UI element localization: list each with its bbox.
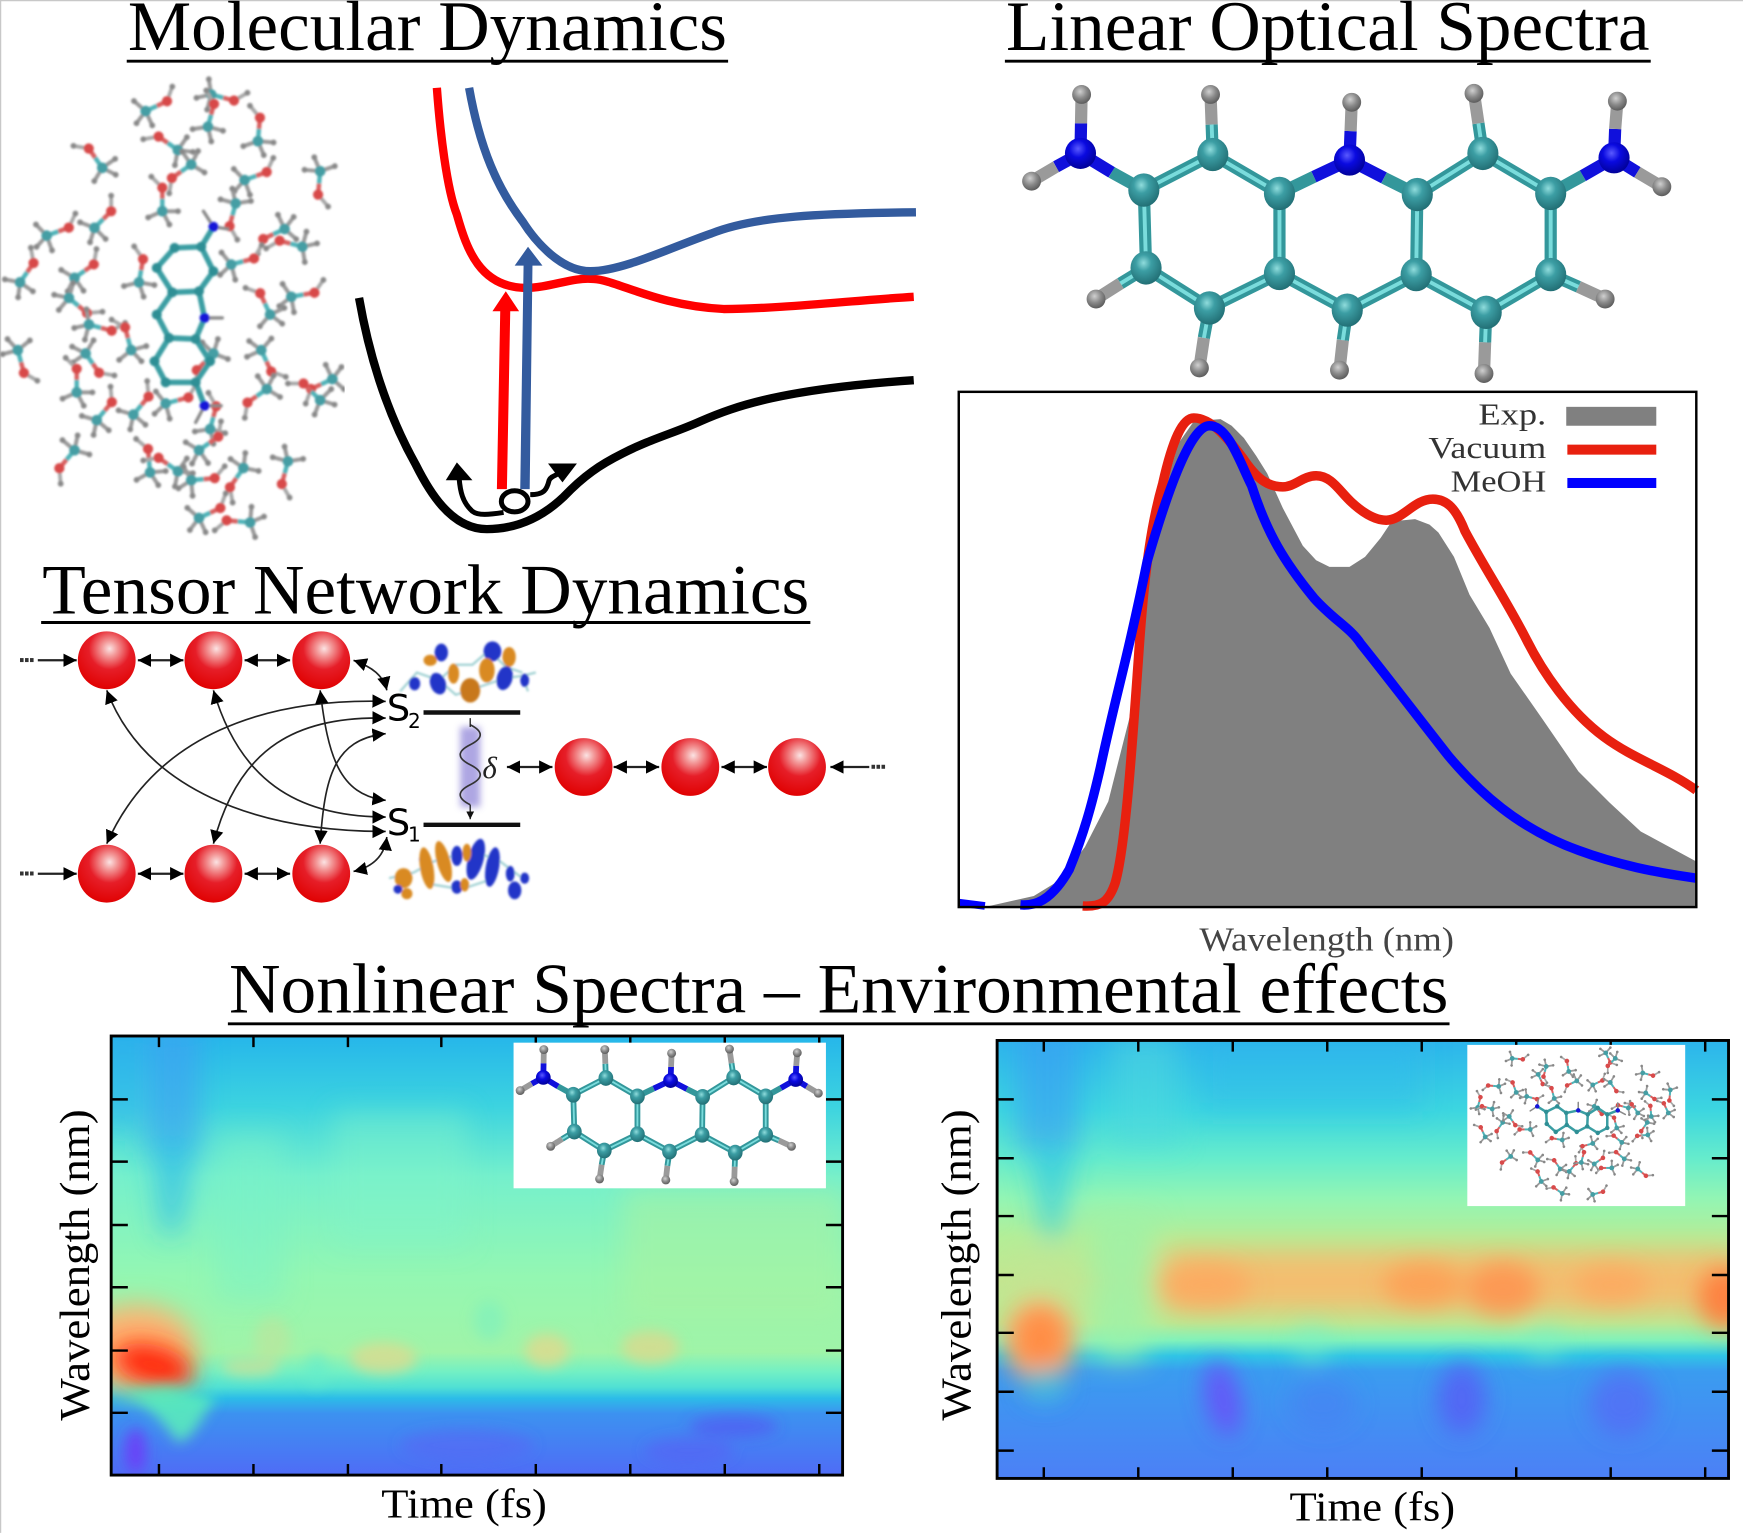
legend: Vacuum [1428, 430, 1546, 465]
orbital: S2 density [400, 641, 536, 703]
title: Tensor Network Dynamics: Tensor Network Dynamics [42, 552, 809, 630]
orbital: S1 density [389, 837, 529, 899]
area: experimental spectrum [985, 419, 1696, 907]
S1 level: S [387, 801, 410, 844]
spheres: bottom bath chain [78, 845, 350, 903]
legend: Exp. [1478, 397, 1546, 432]
inset: solvated molecule [1463, 1042, 1686, 1206]
S2 level [387, 686, 520, 733]
heatmap: vacuum transient spectrum [52, 1028, 845, 1527]
arrow: left wavepacket motion [446, 462, 504, 514]
axes and ticks [997, 1040, 1729, 1478]
arrow: blue excitation [515, 247, 542, 489]
curve: second excited state [469, 88, 916, 271]
heatmap: solvated transient spectrum [933, 1028, 1743, 1531]
S2 level: S [387, 686, 410, 729]
potential energy surface diagram [359, 88, 916, 529]
y axis label: Wavelength (nm) [52, 1109, 99, 1421]
curve: ground state [359, 298, 914, 529]
arrow: red excitation [492, 291, 519, 489]
legend: MeOH [1451, 463, 1546, 498]
plot frame [959, 392, 1696, 907]
spheres: right bath chain [555, 738, 826, 796]
S1 level [387, 801, 520, 846]
S2 level: 2 [408, 709, 421, 733]
title: Nonlinear Spectra - Environmental effects: Nonlinear Spectra – Environmental effects [229, 951, 1448, 1029]
y axis label: Wavelength (nm) [933, 1109, 980, 1421]
molecule: acridine ball and stick [1022, 84, 1671, 383]
arrow: right wavepacket motion [530, 464, 577, 495]
chain continuation dots [20, 658, 885, 875]
spheres: top bath chain [78, 631, 350, 689]
tensor network diagram [20, 631, 885, 903]
vibronic coupling wave [460, 718, 480, 819]
S1 level: 1 [408, 822, 421, 846]
wavepacket ball [501, 491, 528, 512]
inset: isolated molecule [514, 1043, 826, 1188]
x axis label: Time (fs) [1289, 1484, 1455, 1531]
links: coupling arrows [107, 660, 387, 871]
links: chain arrows [38, 660, 869, 874]
absorption spectrum plot [958, 392, 1696, 958]
curve: methanol [1020, 426, 1696, 905]
curve: first excited state [437, 88, 914, 309]
x axis label: Wavelength (nm) [1199, 921, 1454, 958]
delta label: δ [482, 750, 497, 785]
curve: vacuum [1083, 418, 1696, 906]
legend [1428, 397, 1656, 498]
axes and ticks [111, 1036, 843, 1475]
solvated molecule snapshot [0, 62, 356, 558]
x axis label: Time (fs) [381, 1480, 547, 1527]
